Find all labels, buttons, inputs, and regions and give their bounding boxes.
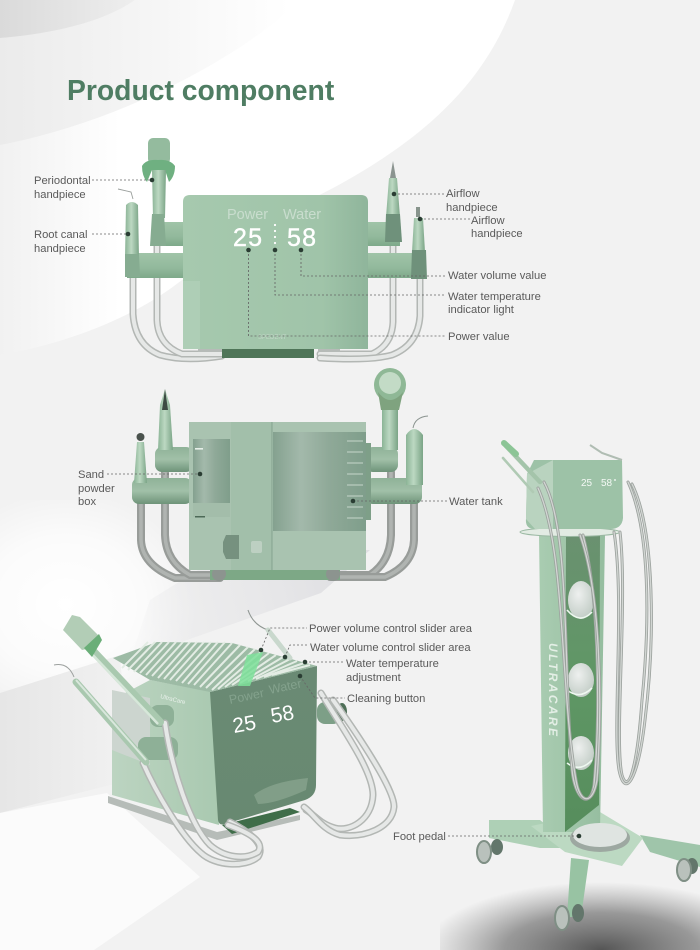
callout: cleaning button: Cleaning button <box>347 693 425 705</box>
head unit: 25 <box>581 478 593 489</box>
callout: water temperature adjustment <box>303 658 439 684</box>
callout: water temperature indicator light: Water temperature <box>448 291 541 303</box>
glass eggs <box>567 581 594 770</box>
badge <box>251 541 262 553</box>
arms: rear view <box>132 443 422 520</box>
callout: airflow handpiece 1: handpiece <box>446 202 498 214</box>
wheels <box>477 839 698 930</box>
callout: airflow handpiece 1 <box>392 188 498 214</box>
trolley base legs <box>489 812 700 917</box>
callout: water temperature indicator light: indicator light <box>448 304 515 316</box>
root canal handpiece: angled <box>54 664 146 762</box>
main body: rear view <box>189 422 366 570</box>
device: front view <box>118 138 427 359</box>
water tank window <box>273 432 366 531</box>
hoses: trolley <box>538 482 651 799</box>
dark underside <box>222 808 300 834</box>
callout: water tank: Water tank <box>449 496 503 508</box>
device: angled view <box>54 610 394 864</box>
main body: front view <box>183 195 368 349</box>
screen: Power <box>227 207 268 223</box>
callout: airflow handpiece 2 <box>418 215 523 240</box>
reflection <box>254 778 308 804</box>
callout: root canal handpiece <box>34 229 130 255</box>
screen: angled: Water <box>268 676 303 697</box>
screen: Water <box>283 207 321 223</box>
root canal handpiece <box>118 189 140 277</box>
callout: water temperature adjustment: Water temperature <box>346 658 439 670</box>
callout: periodontal handpiece: handpiece <box>34 189 86 201</box>
brand lettering: ULTRACARE <box>546 643 560 737</box>
arms: front view <box>127 222 424 278</box>
callout: cleaning button <box>298 674 425 705</box>
callout: water volume value <box>299 248 546 282</box>
callout: periodontal handpiece <box>34 175 154 201</box>
column recess <box>565 535 600 832</box>
callout: sand powder box: box <box>78 496 96 508</box>
screen: SPEDENT <box>258 335 287 341</box>
callout: power value <box>246 248 510 343</box>
callout: power volume control slider area <box>259 623 473 652</box>
callout: water tank <box>351 496 503 508</box>
column <box>539 535 605 832</box>
screen: 25 <box>233 224 262 252</box>
grey panels <box>112 690 150 765</box>
callout: airflow handpiece 2: handpiece <box>471 228 523 240</box>
callout: periodontal handpiece: Periodontal <box>34 175 91 187</box>
callout: water volume control slider area: Water volume control slider area <box>310 642 471 654</box>
callout: sand powder box <box>78 469 202 508</box>
callout: water temperature indicator light <box>273 248 541 316</box>
title: Product component <box>67 74 335 106</box>
foot pedal disc <box>570 823 630 852</box>
handpieces right: rear view <box>374 368 428 485</box>
callout: sand powder box: powder <box>78 483 115 495</box>
hose group: front view <box>133 236 420 359</box>
base and wheels: rear view <box>210 567 340 581</box>
sand powder box window <box>193 439 230 518</box>
side panel <box>183 281 200 349</box>
screen: angled: 58 <box>269 701 296 728</box>
front face <box>210 666 317 824</box>
screen: 58 <box>287 224 316 252</box>
callout: water temperature adjustment: adjustment <box>346 672 402 684</box>
airflow handpieces <box>385 161 427 279</box>
screen <box>227 207 321 341</box>
tray <box>520 528 620 536</box>
handpieces: trolley <box>503 443 622 492</box>
base plate <box>108 796 300 840</box>
base: front view <box>198 346 340 358</box>
top ribbed <box>113 642 317 692</box>
callout: sand powder box: Sand <box>78 469 104 481</box>
head unit <box>526 460 623 529</box>
periodontal handpiece <box>142 138 175 246</box>
callout: power value: Power value <box>448 331 510 343</box>
callout: root canal handpiece: Root canal <box>34 229 88 241</box>
callout: power volume control slider area: Power volume control slider area <box>309 623 473 635</box>
arms: angled <box>138 702 347 760</box>
screen: angled: Power <box>228 686 265 707</box>
device: rear view <box>132 368 428 581</box>
callout: water volume value: Water volume value <box>448 270 546 282</box>
head unit: 58 <box>601 478 613 489</box>
hoses: rear view <box>141 472 414 578</box>
screen: angled <box>228 676 303 738</box>
callout: water volume control slider area <box>283 642 471 659</box>
logo on shell: UltraCare <box>160 694 187 706</box>
left face <box>112 680 219 825</box>
hoses: angled <box>143 693 394 864</box>
callout: airflow handpiece 1: Airflow <box>446 188 480 200</box>
callout: root canal handpiece: handpiece <box>34 243 86 255</box>
periodontal handpiece: angled <box>63 615 160 724</box>
callout: airflow handpiece 2: Airflow <box>471 215 505 227</box>
callout: foot pedal <box>393 831 581 843</box>
power socket <box>223 535 239 559</box>
third handpiece: angled <box>248 610 290 658</box>
device: trolley <box>477 443 700 930</box>
handpieces: rear view <box>134 389 173 483</box>
callout: foot pedal: Foot pedal <box>393 831 446 843</box>
screen: angled: 25 <box>231 711 258 738</box>
